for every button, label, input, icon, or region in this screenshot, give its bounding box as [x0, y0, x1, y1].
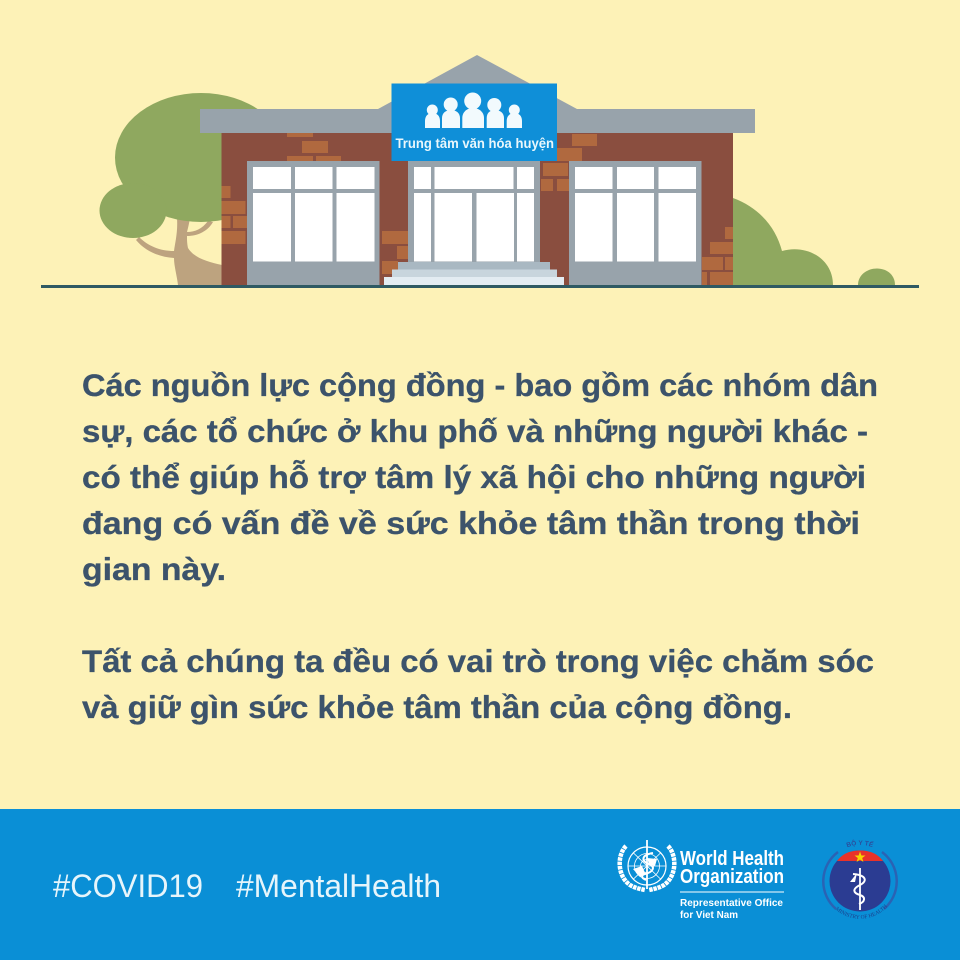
sign board	[392, 84, 557, 161]
tree	[100, 93, 287, 285]
sign text: Trung tâm văn hóa huyện	[396, 136, 554, 151]
ground line	[41, 285, 919, 288]
icon: WHO emblem	[620, 840, 674, 890]
icon: group of people	[425, 92, 522, 128]
hashtags: #MentalHealth	[236, 868, 441, 904]
icon: Ministry of Health emblem: BỘ Y TẾ	[846, 840, 874, 847]
WHO wordmark: Representative Office	[680, 897, 783, 909]
icon: Ministry of Health emblem	[822, 840, 898, 919]
WHO wordmark: for Viet Nam	[680, 909, 738, 921]
left window	[247, 161, 380, 285]
right window	[569, 161, 702, 285]
paragraph 1: đang có vấn đề về sức khỏe tâm thần trong thời	[82, 505, 860, 541]
bushes	[733, 198, 895, 285]
paragraph 2: Tất cả chúng ta đều có vai trò trong việc chăm sóc	[82, 643, 874, 679]
entrance steps	[384, 262, 564, 285]
flat roof	[200, 109, 755, 133]
brick wall	[222, 133, 733, 285]
paragraph 2: và giữ gìn sức khỏe tâm thần của cộng đồng.	[82, 689, 792, 725]
WHO wordmark	[680, 848, 784, 921]
entrance door	[408, 161, 540, 271]
paragraph 2	[82, 643, 874, 725]
paragraph 1	[82, 367, 878, 587]
WHO wordmark: Organization	[680, 866, 784, 888]
hashtags: #COVID19	[53, 868, 203, 904]
hashtags	[53, 868, 441, 904]
illustration: cultural centre building	[41, 55, 919, 288]
icon: Ministry of Health emblem: MINISTRY OF HEALTH	[836, 904, 887, 919]
gable roof	[378, 55, 577, 109]
WHO wordmark: World Health	[680, 848, 784, 870]
footer band	[0, 809, 960, 960]
paragraph 1: có thể giúp hỗ trợ tâm lý xã hội cho những người	[82, 459, 866, 495]
paragraph 1: sự, các tổ chức ở khu phố và những người khác -	[82, 413, 868, 449]
paragraph 1: gian này.	[82, 551, 226, 587]
paragraph 1: Các nguồn lực cộng đồng - bao gồm các nhóm dân	[82, 367, 878, 403]
